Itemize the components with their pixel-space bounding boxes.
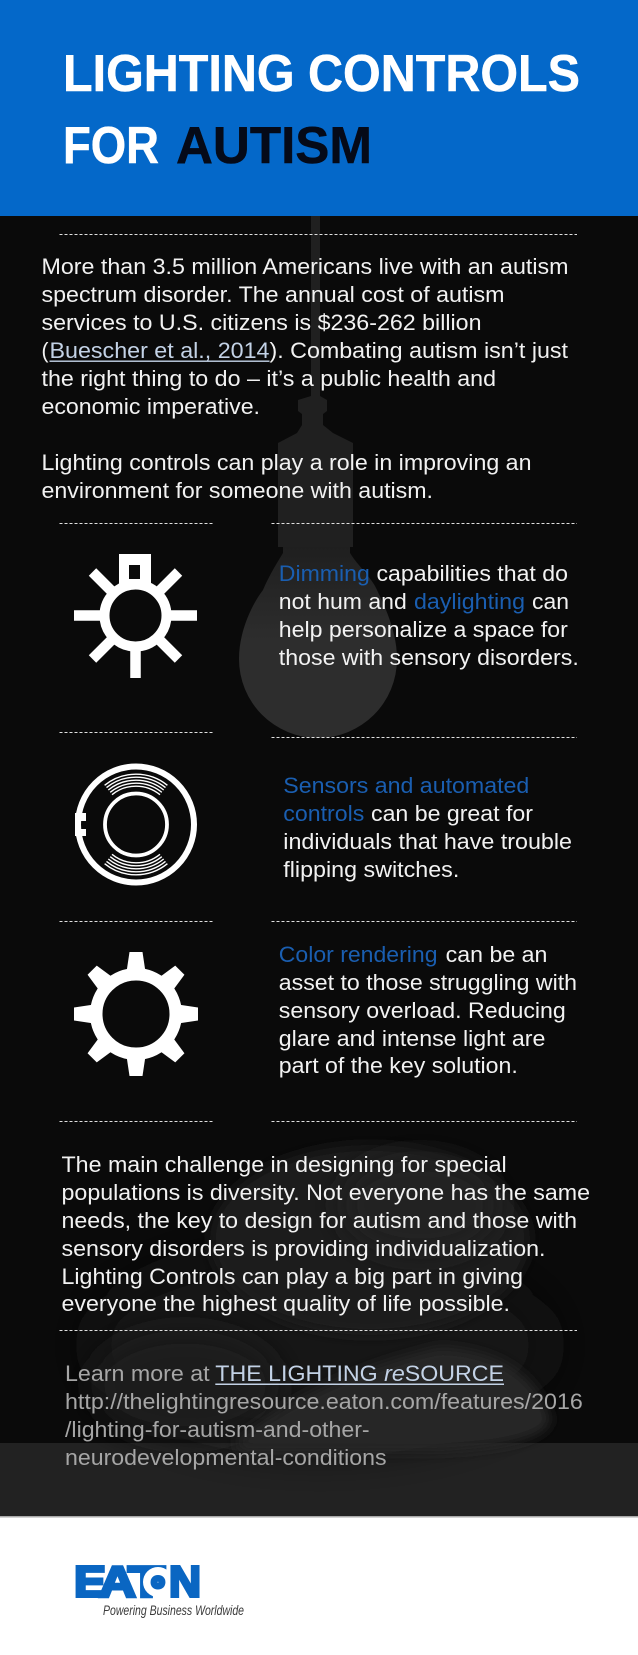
closing text block: sensory disorders is providing individualization. [62,1236,546,1261]
intro text block: environment for someone with autism. [42,478,433,503]
Eaton logo: O [152,1574,164,1590]
Eaton logo: N [169,1558,201,1606]
closing text block [62,1152,590,1316]
text: dimming: capabilities that do [376,561,568,586]
background photo: hanging light bulb [239,216,397,738]
title: AUTISM [176,117,372,175]
text: dimming: those with sensory disorders. [279,645,579,670]
title: FOR [63,117,159,175]
text: dimming: not hum and [279,589,407,614]
text: color rendering: asset to those struggling with [279,970,577,995]
intro text block: economic imperative. [42,394,260,419]
text: color rendering [279,942,577,1078]
text: color rendering: Color rendering [279,942,438,967]
closing text block: needs, the key to design for autism and those with [62,1208,577,1233]
Eaton logo [74,1558,244,1618]
text: dimming: daylighting [414,589,525,614]
icon: dimming sun [74,554,197,678]
intro text block: More than 3.5 million Americans live with an autism [42,254,568,279]
icon: sensor [75,766,194,882]
Eaton logo: E [74,1558,106,1606]
text: color rendering: can be an [446,942,547,967]
background photo: child resting on arms [0,1145,638,1517]
learn more block: neurodevelopmental-conditions [65,1445,387,1470]
footer [0,1517,638,1655]
text: color rendering: sensory overload. Reducing [279,998,566,1023]
text: sensors: controls [283,801,364,826]
intro text block [42,254,568,503]
closing text block: The main challenge in designing for special [62,1152,507,1177]
divider lines [60,234,577,1330]
text: color rendering: part of the key solution. [279,1053,518,1078]
title [63,45,580,175]
learn more block: THE LIGHTING reSOURCE [215,1361,504,1386]
text: sensors: individuals that have trouble [283,829,572,854]
text: dimming [279,561,579,670]
icon: gear [74,952,198,1076]
closing text block: populations is diversity. Not everyone has the same [62,1180,590,1205]
Eaton logo: Powering Business Worldwide [103,1603,244,1618]
intro text block: Lighting controls can play a role in improving an [42,450,532,475]
closing text block: everyone the highest quality of life possible. [62,1291,510,1316]
text: sensors: can be great for [371,801,533,826]
learn more block: /lighting-for-autism-and-other- [65,1417,370,1442]
learn more block: http://thelightingresource.eaton.com/features/2016 [65,1389,583,1414]
text: dimming: can [532,589,569,614]
intro text block: the right thing to do – it’s a public health and [42,366,496,391]
closing text block: Lighting Controls can play a big part in giving [62,1264,523,1289]
learn more block [65,1361,583,1470]
dark background panel [0,216,638,1517]
text: sensors: flipping switches. [283,857,459,882]
intro text block: spectrum disorder. The annual cost of autism [42,282,504,307]
text: sensors: Sensors and automated [283,773,529,798]
text: dimming: Dimming [279,561,370,586]
Eaton logo: T [128,1558,165,1606]
intro text block: ). Combating autism isn’t just [270,338,568,363]
intro text block: services to U.S. citizens is $236-262 billion [42,310,481,335]
learn more block: Learn more at [65,1361,210,1386]
text: color rendering: glare and intense light are [279,1026,545,1051]
Eaton logo: A [99,1558,136,1606]
header banner [0,0,638,216]
intro text block: Buescher et al., 2014 [50,338,270,363]
text: dimming: help personalize a space for [279,617,568,642]
text: sensors [283,773,572,882]
footer rule [0,1516,638,1518]
title: LIGHTING CONTROLS [63,45,580,103]
intro text block: ( [42,338,49,363]
